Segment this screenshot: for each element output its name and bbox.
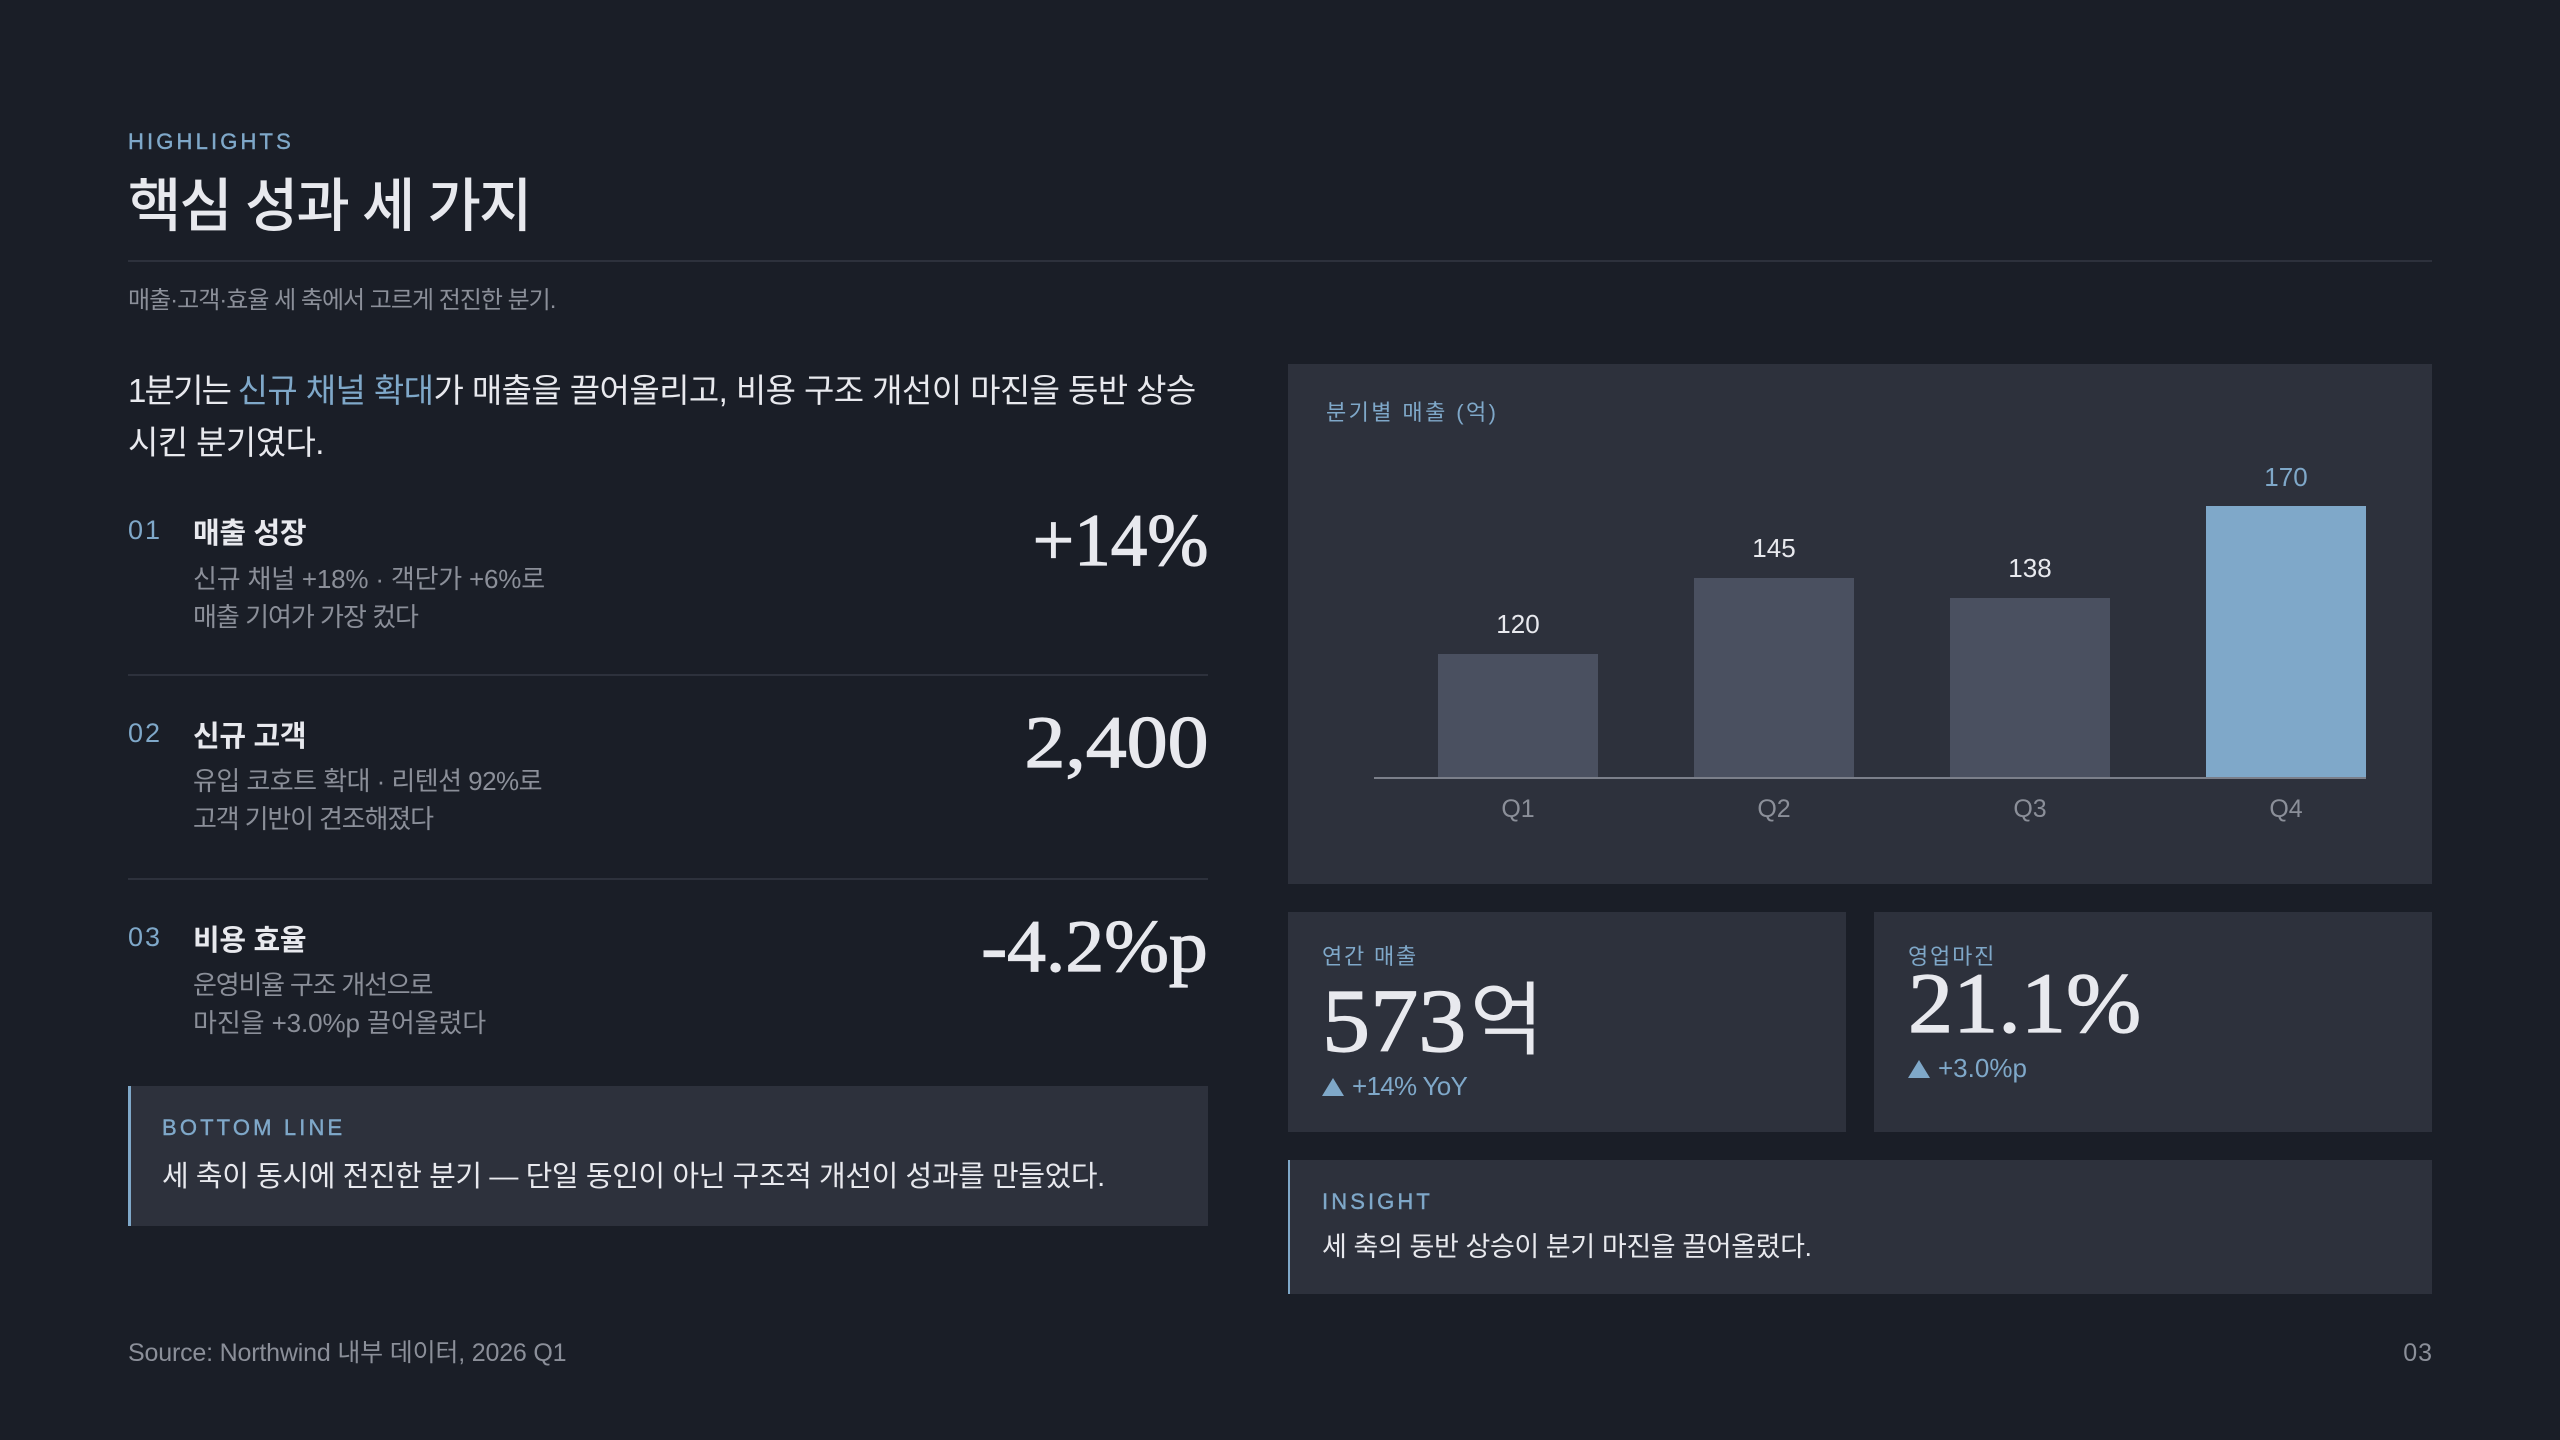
KPI delta: +3.0%p [1938, 1053, 2027, 1083]
bar Q1 [1438, 609, 1598, 823]
KPI label: 영업마진 [1908, 944, 1996, 969]
bar Q4 highlighted: Q4 [2269, 795, 2303, 823]
panel: metric 03 [128, 906, 1208, 1038]
description: 마진을 +3.0%p 끌어올렸다 [193, 1008, 486, 1038]
bar Q2: Q2 [1757, 795, 1791, 823]
subtitle: 매출·고객·효율 세 축에서 고르게 전진한 분기. [128, 287, 555, 314]
description: 고객 기반이 견조해졌다 [193, 804, 433, 834]
heading: 매출 성장: 매출 성장 [193, 518, 306, 550]
callout text: 세 축이 동시에 전진한 분기 — 단일 동인이 아닌 구조적 개선이 성과를 만들었다. [162, 1161, 1105, 1193]
value -4.2%p: -4.2%p [981, 906, 1208, 988]
bar chart [1374, 462, 2366, 823]
number 02: 02 [128, 718, 162, 748]
bar Q1: Q1 [1501, 795, 1535, 823]
heading: 비용 효율: 비용 효율 [193, 925, 306, 957]
value 2,400: 2,400 [1024, 702, 1208, 784]
panel: KPI annual revenue [1288, 912, 1846, 1132]
bar Q1: 120 [1496, 609, 1540, 639]
description [193, 970, 486, 1038]
bar Q2: 145 [1752, 533, 1796, 563]
lead text: 시킨 분기였다. [128, 424, 324, 461]
callout: bottom line [128, 1086, 1208, 1226]
lead text [128, 372, 1196, 461]
bar Q4 highlighted [2206, 462, 2366, 823]
KPI value: 억 [1470, 956, 1544, 1072]
panel: KPI operating margin [1874, 912, 2432, 1132]
heading: 신규 고객: 신규 고객 [193, 721, 306, 753]
number 03: 03 [128, 922, 162, 952]
description: 매출 기여가 가장 컸다 [193, 602, 418, 632]
bar Q3: Q3 [2013, 795, 2047, 823]
KPI value: 573 [1322, 972, 1466, 1071]
callout: insight [1288, 1160, 2432, 1294]
panel: metric 02 [128, 702, 1208, 834]
panel: metric 01 [128, 500, 1208, 632]
title: 핵심 성과 세 가지 [128, 174, 530, 239]
KPI value: 21.1% [1908, 955, 2141, 1051]
bar Q4 highlighted: 170 [2264, 462, 2308, 492]
description: 운영비율 구조 개선으로 [193, 970, 432, 1000]
callout text: 세 축의 동반 상승이 분기 마진을 끌어올렸다. [1322, 1232, 1812, 1262]
bar Q3 [1950, 553, 2110, 823]
description [193, 564, 545, 632]
number 01: 01 [128, 515, 162, 545]
callout label: BOTTOM LINE [162, 1115, 345, 1140]
bar Q2 [1694, 533, 1854, 823]
chart title: 분기별 매출 (억) [1326, 400, 1498, 425]
footer source: Source: Northwind 내부 데이터, 2026 Q1 [128, 1339, 566, 1367]
description: 유입 코호트 확대 · 리텐션 92%로 [193, 766, 542, 796]
KPI delta: +14% YoY [1352, 1071, 1467, 1101]
description: 신규 채널 +18% · 객단가 +6%로 [193, 564, 545, 594]
value +14%: +14% [1032, 500, 1208, 582]
description [193, 766, 542, 834]
KPI value [1322, 956, 1544, 1072]
page number: 03 [2403, 1339, 2433, 1367]
eyebrow: highlights: HIGHLIGHTS [128, 129, 294, 154]
KPI label: 연간 매출 [1322, 944, 1418, 969]
panel: quarterly revenue chart [1288, 364, 2432, 884]
bar Q3: 138 [2008, 553, 2052, 583]
callout label: INSIGHT [1322, 1189, 1433, 1214]
lead text: 1분기는 신규 채널 확대가 매출을 끌어올리고, 비용 구조 개선이 마진을 동반 상승 [128, 372, 1196, 409]
